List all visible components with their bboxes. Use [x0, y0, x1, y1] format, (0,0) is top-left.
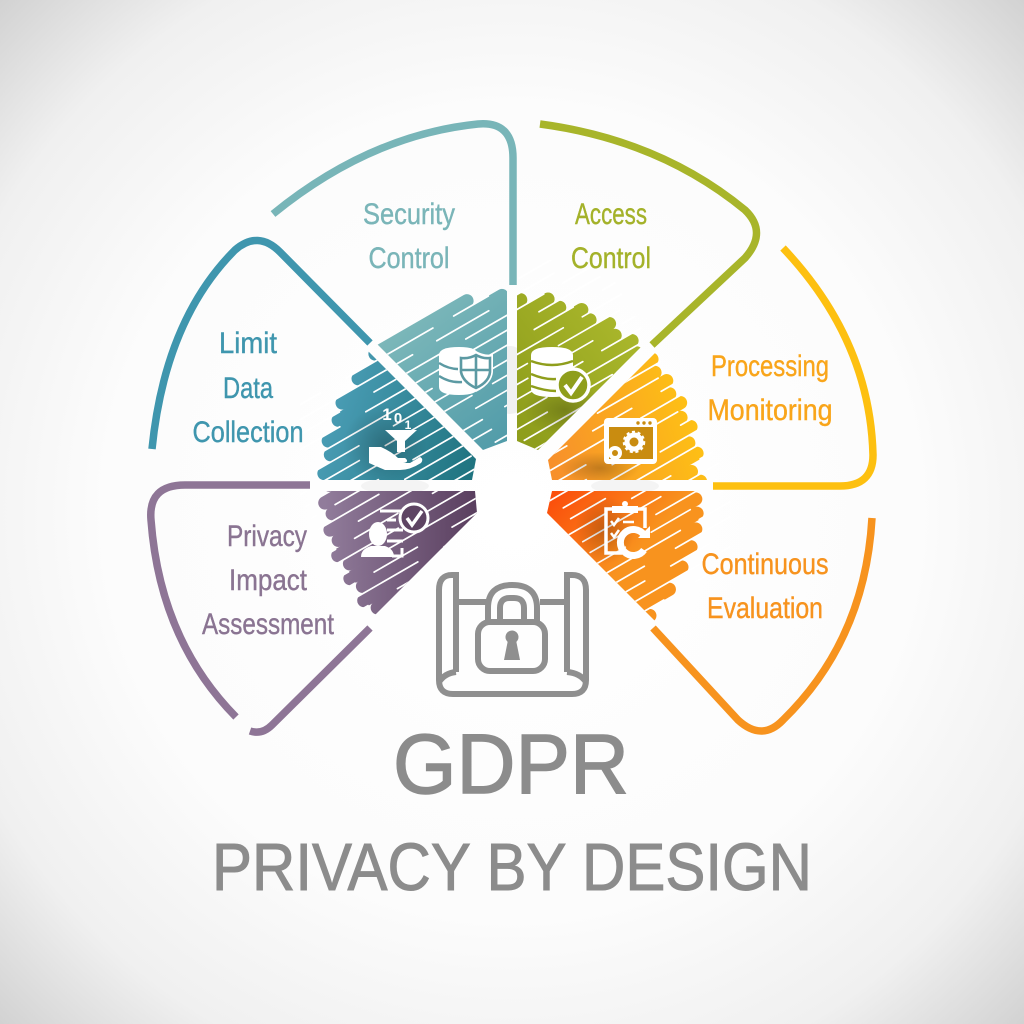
icon: gear window — [604, 418, 657, 464]
icon: person with checked document — [361, 504, 428, 557]
label: access control: Access — [575, 198, 647, 231]
panel: privacy impact assessment — [147, 481, 477, 736]
panel: limit data collection — [148, 236, 476, 480]
label: privacy impact assessment — [202, 520, 335, 641]
outline: security control — [273, 124, 513, 285]
outline: privacy impact assessment — [151, 485, 370, 732]
icon: data funnel and hand: 1 — [382, 405, 392, 424]
wedge: continuous evaluation — [547, 491, 704, 620]
label: continuous evaluation: Continuous — [702, 548, 828, 581]
label: limit data collection: Limit — [219, 327, 278, 360]
label: access control: Control — [571, 242, 651, 275]
icon: database shield — [439, 347, 493, 395]
outline: access control — [540, 124, 756, 345]
icon: padlock on blueprint — [439, 575, 586, 694]
label: continuous evaluation — [702, 548, 828, 625]
wedge: limit data collection — [317, 352, 476, 480]
label: privacy impact assessment: Impact — [229, 564, 308, 597]
label: continuous evaluation: Evaluation — [707, 592, 823, 625]
label: security control: Control — [368, 242, 450, 275]
label: limit data collection: Data — [223, 372, 273, 405]
label: limit data collection: Collection — [192, 416, 304, 449]
icon: database check — [531, 347, 589, 401]
panel: security control — [270, 120, 517, 450]
icon: data funnel and hand: 1 — [405, 418, 412, 432]
wedge: security control — [378, 288, 507, 450]
label: limit data collection — [192, 327, 304, 449]
icon: clipboard refresh — [606, 501, 650, 556]
label: privacy impact assessment: Privacy — [227, 520, 307, 553]
outline: continuous evaluation — [653, 518, 872, 731]
label: processing monitoring: Monitoring — [708, 394, 832, 427]
label: access control — [571, 198, 651, 275]
panel: access control — [517, 120, 760, 450]
panel: continuous evaluation — [547, 491, 876, 735]
title: GDPR: GDPR — [393, 717, 629, 811]
icon: data funnel and hand: 0 — [394, 410, 402, 427]
label: security control: Security — [363, 198, 455, 231]
wedge: privacy impact assessment — [318, 491, 477, 614]
subtitle: privacy by design: PRIVACY BY DESIGN — [212, 830, 812, 905]
label: privacy impact assessment: Assessment — [202, 608, 335, 641]
icon: data funnel and hand — [369, 405, 422, 470]
wedge: processing monitoring — [548, 353, 707, 480]
outline: processing monitoring — [713, 248, 873, 486]
label: processing monitoring — [708, 350, 832, 427]
label: processing monitoring: Processing — [711, 350, 829, 383]
label: security control — [363, 198, 455, 275]
gap shadows — [361, 346, 659, 494]
wedge: access control — [517, 292, 640, 450]
outline: limit data collection — [152, 240, 370, 449]
panel: processing monitoring — [548, 245, 877, 490]
